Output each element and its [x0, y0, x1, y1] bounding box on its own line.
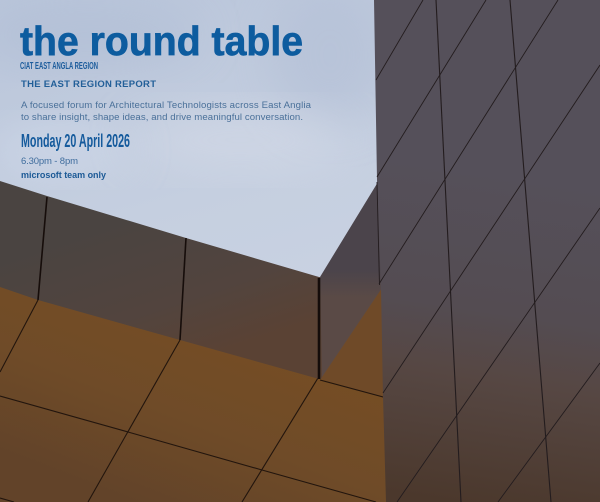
subtitle: organiser: CIAT EAST ANGLA REGION	[20, 60, 98, 72]
heading: report: THE EAST REGION REPORT	[21, 79, 156, 90]
title: the round table	[20, 18, 303, 64]
building: tower cladding	[374, 0, 600, 502]
building: lit triangle and return wall	[319, 182, 385, 398]
building: soffit panels	[0, 285, 388, 502]
description: to share insight, shape ideas, and drive meaningful conversation.	[21, 112, 303, 123]
soffit panel joints	[0, 300, 376, 502]
tower panel joints	[376, 0, 600, 502]
event location: microsoft team only	[21, 170, 106, 180]
event time: 6.30pm - 8pm	[21, 156, 78, 167]
description	[21, 100, 312, 123]
building: parapet panels	[0, 181, 323, 379]
event date: Monday 20 April 2026	[21, 131, 130, 151]
parapet panel joints	[38, 197, 186, 340]
corner joint	[318, 278, 320, 379]
text block: event details	[20, 18, 312, 180]
base joint	[320, 380, 383, 397]
description: A focused forum for Architectural Technologists across East Anglia	[21, 100, 312, 111]
